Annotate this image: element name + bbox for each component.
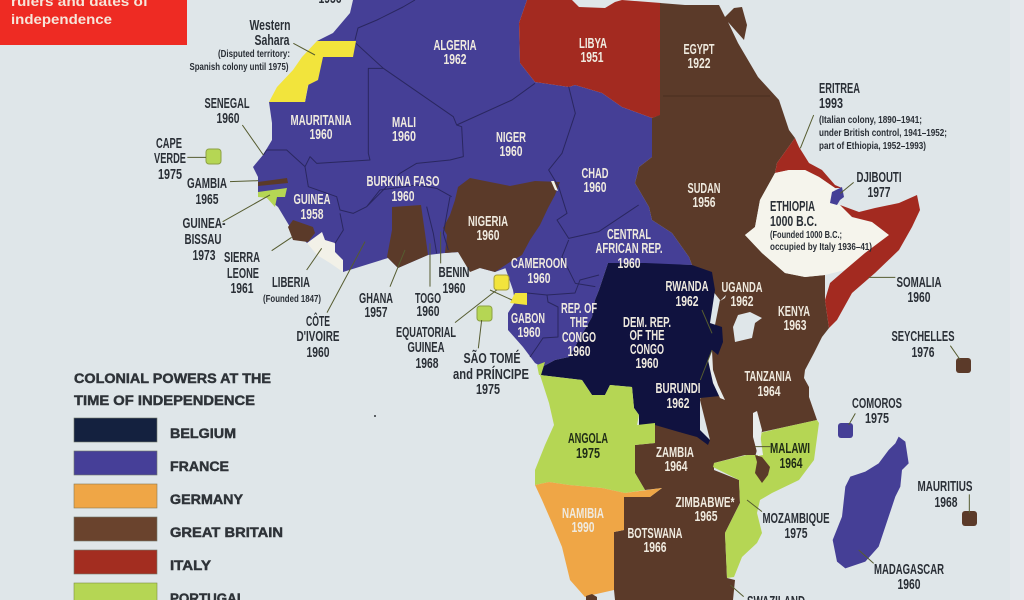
map of Africa <box>253 0 920 600</box>
label: Sudan: 1956 <box>692 195 716 211</box>
label: Mauritania: 1960 <box>310 127 332 143</box>
region: Malawi south <box>755 455 770 483</box>
note: Ethiopia history: occupied by Italy 1936–41) <box>770 241 872 253</box>
label: Seychelles: 1976 <box>912 345 934 361</box>
label: Equatorial Guinea: 1968 <box>416 356 438 372</box>
label: Chad: CHAD <box>582 166 608 182</box>
label: Angola <box>568 431 608 462</box>
label: Angola: 1975 <box>576 446 600 462</box>
label: Ghana: 1957 <box>364 305 388 321</box>
label: Cape Verde <box>154 136 186 183</box>
label: Rep. of the Congo: REP. OF <box>561 301 597 317</box>
label: Mali <box>392 115 416 145</box>
label: Western Sahara <box>190 18 290 73</box>
label: Gabon: GABON <box>511 311 545 327</box>
label: Niger <box>496 130 526 160</box>
label: Central African Rep. <box>596 227 662 272</box>
label: Libya <box>579 36 607 66</box>
note: Ethiopia history <box>770 229 872 253</box>
label: Tanzania: 1964 <box>758 384 780 400</box>
label: Rwanda <box>666 279 709 310</box>
label: Burkina Faso <box>366 174 440 205</box>
legend item: Belgium: BELGIUM <box>170 426 236 441</box>
label: Gambia: GAMBIA <box>187 176 227 192</box>
label: Dem. Rep. of the Congo: CONGO <box>630 342 664 358</box>
label: Burundi: 1962 <box>666 396 690 412</box>
label: Central African Rep.: CENTRAL <box>607 227 651 243</box>
note: Eritrea history: (Italian colony, 1890–1941; <box>819 114 922 126</box>
label: Guinea <box>294 192 331 223</box>
region: Lake Victoria <box>733 312 762 342</box>
label: Egypt: EGYPT <box>684 42 715 58</box>
label: Malawi <box>770 441 810 472</box>
label: Western Sahara: Spanish colony until 1975) <box>190 61 288 73</box>
label: Togo: 1960 <box>416 304 440 320</box>
label: Ghana: GHANA <box>359 291 393 307</box>
label: Gambia <box>187 176 227 208</box>
region: Djibouti <box>830 187 844 205</box>
label: Algeria <box>434 38 477 68</box>
region: South Africa fragment <box>586 594 597 600</box>
label: Egypt: 1922 <box>688 56 710 72</box>
label: Cote d'Ivoire: 1960 <box>306 345 330 361</box>
label: Sierra Leone: LEONE <box>227 266 259 282</box>
legend item: Germany <box>74 484 243 508</box>
label: Togo: TOGO <box>415 291 441 307</box>
label: Uganda <box>722 280 763 310</box>
label: Guinea: GUINEA <box>294 192 331 208</box>
label: Algeria: ALGERIA <box>434 38 477 54</box>
label: Cote d'Ivoire: D'IVOIRE <box>296 329 340 345</box>
label: Liberia <box>263 275 321 305</box>
label: Liberia: LIBERIA <box>272 275 310 291</box>
icon: Cape Verde <box>206 149 221 164</box>
label: Rep. of the Congo: THE <box>570 315 588 331</box>
label: Mozambique: MOZAMBIQUE <box>762 511 830 527</box>
legend item: Great Britain <box>74 517 283 541</box>
label: Cape Verde: VERDE <box>154 151 186 167</box>
label: Ethiopia: 1000 B.C. <box>770 214 817 230</box>
label: Somalia <box>896 275 942 306</box>
label: Mauritania: MAURITANIA <box>290 113 352 129</box>
icon: Seychelles <box>956 358 971 373</box>
label: Dem. Rep. of the Congo <box>623 315 671 372</box>
label: Uganda: UGANDA <box>722 280 763 296</box>
region: Western Sahara <box>269 41 356 102</box>
label: Mauritius <box>918 479 973 511</box>
label: Eritrea <box>819 81 860 112</box>
label: Somalia: SOMALIA <box>896 275 942 291</box>
label: Djibouti: 1977 <box>868 185 890 201</box>
region: Cabinda <box>537 362 545 375</box>
region: Lake Malawi <box>753 411 763 456</box>
label: Sierra Leone: 1961 <box>230 281 254 297</box>
label: Chad <box>582 166 608 196</box>
label: Mali: 1960 <box>392 129 416 145</box>
region: Sierra Leone <box>288 220 315 242</box>
label: Tanzania <box>744 369 792 400</box>
label: Cameroon: CAMEROON <box>511 256 567 272</box>
label: Madagascar: 1960 <box>898 577 920 593</box>
region: British colonies <box>614 3 829 600</box>
label: Namibia: NAMIBIA <box>562 506 604 522</box>
note: Ethiopia history: (Founded 1000 B.C.; <box>770 229 842 241</box>
label: Chad: 1960 <box>584 180 606 196</box>
label: Madagascar: MADAGASCAR <box>874 562 944 578</box>
legend item: Germany: GERMANY <box>170 492 243 507</box>
region: small lake by Uganda <box>720 295 726 301</box>
label: Sudan: SUDAN <box>688 181 720 197</box>
region: Libya <box>519 0 661 118</box>
label: Djibouti <box>856 170 902 201</box>
label: Western Sahara: Western <box>250 18 290 34</box>
icon: Mauritius <box>962 511 977 526</box>
label: Senegal: SENEGAL <box>204 96 250 112</box>
region: Ethiopia <box>745 170 889 277</box>
label: Comoros: 1975 <box>865 411 889 427</box>
label: Equatorial Guinea: EQUATORIAL <box>396 325 456 341</box>
legend title: TIME OF INDEPENDENCE <box>74 393 255 408</box>
region: Eritrea <box>775 138 842 188</box>
label: Eritrea: 1993 <box>819 96 843 112</box>
legend item: Italy: ITALY <box>170 558 211 573</box>
label: Cameroon <box>511 256 567 287</box>
label: Mali: MALI <box>392 115 416 131</box>
label: Rwanda: 1962 <box>676 294 698 310</box>
label: Nigeria: 1960 <box>476 228 500 244</box>
label: Somalia: 1960 <box>908 290 930 306</box>
label: Cape Verde: 1975 <box>158 167 182 183</box>
label: Ghana <box>359 291 393 321</box>
region: Belgian Congo <box>540 263 723 445</box>
label: Western Sahara: (Disputed territory: <box>218 48 290 60</box>
label: Zambia <box>656 445 694 475</box>
icon: Sao Tome <box>477 306 492 321</box>
legend item: Belgium <box>74 418 236 442</box>
label: Benin: BENIN <box>438 265 470 281</box>
label: Sao Tome and Principe <box>453 349 529 398</box>
label: Mauritius: 1968 <box>934 495 958 511</box>
label: Guinea-Bissau: 1973 <box>192 248 216 264</box>
label: Western Sahara: Sahara <box>254 33 290 49</box>
label: Libya: LIBYA <box>579 36 607 52</box>
label: Central African Rep.: AFRICAN REP. <box>596 241 662 257</box>
label: Namibia: 1990 <box>572 520 594 536</box>
label: Kenya: 1963 <box>784 318 806 334</box>
label: Ethiopia: ETHIOPIA <box>770 199 815 215</box>
label: Kenya: KENYA <box>778 304 810 320</box>
label: Ethiopia <box>770 199 817 230</box>
label: Benin <box>438 265 470 297</box>
region: Guinea-Bissau <box>258 188 287 207</box>
region: Egypt-Sudan border <box>663 95 770 97</box>
label: Burundi: BURUNDI <box>656 381 700 397</box>
label: Cote d'Ivoire <box>296 312 340 361</box>
label: Tanzania: TANZANIA <box>744 369 792 385</box>
label: Botswana: BOTSWANA <box>628 526 683 542</box>
label: Gambia: 1965 <box>196 192 218 208</box>
label: Gabon <box>511 311 545 341</box>
label: Rep. of the Congo <box>561 301 597 360</box>
note: Eritrea history: under British control, 1941–1952; <box>819 127 947 139</box>
legend item: France <box>74 451 229 475</box>
label: Niger: NIGER <box>496 130 526 146</box>
label: Mauritius: MAURITIUS <box>918 479 973 495</box>
label: Guinea-Bissau: GUINEA- <box>182 216 226 232</box>
label: Egypt <box>684 42 715 72</box>
legend title: COLONIAL POWERS AT THE <box>74 371 271 386</box>
note: Eritrea history <box>819 114 947 152</box>
label: Algeria: 1962 <box>444 52 466 68</box>
label: Zambia: 1964 <box>664 459 688 475</box>
label: Mozambique <box>762 511 830 542</box>
label: Guinea-Bissau: BISSAU <box>184 232 222 248</box>
leader lines <box>187 43 969 597</box>
label: Cape Verde: CAPE <box>156 136 182 152</box>
region: French colonies <box>253 0 692 367</box>
label: Sudan <box>688 181 720 211</box>
region: Equatorial Guinea mainland <box>510 293 527 305</box>
label: Madagascar <box>874 562 944 593</box>
label: Senegal: 1960 <box>216 111 240 127</box>
label: Togo <box>415 291 441 320</box>
region: Lake Tanganyika <box>708 350 725 400</box>
label: Guinea-Bissau <box>182 216 226 264</box>
legend item: Italy <box>74 550 211 574</box>
label: Malawi: 1964 <box>780 456 802 472</box>
label: Rep. of the Congo: 1960 <box>568 344 590 360</box>
label: Equatorial Guinea: GUINEA <box>408 340 445 356</box>
label: Angola: ANGOLA <box>568 431 608 447</box>
label: Djibouti: DJIBOUTI <box>856 170 902 186</box>
label: Senegal <box>204 96 250 127</box>
label: Uganda: 1962 <box>730 294 754 310</box>
islands <box>206 149 977 526</box>
label: Kenya <box>778 304 810 334</box>
label: Mozambique: 1975 <box>784 526 808 542</box>
label: Guinea: 1958 <box>300 207 324 223</box>
label: Equatorial Guinea <box>396 325 456 372</box>
legend title <box>74 371 271 408</box>
region: Ghana <box>387 205 428 268</box>
label: Zimbabwe: 1965 <box>694 509 718 525</box>
label: Seychelles <box>892 329 955 361</box>
label: Sierra Leone <box>224 250 260 297</box>
label: Botswana <box>628 526 683 556</box>
title block: independence <box>11 11 112 27</box>
note: Eritrea history: part of Ethiopia, 1952–1993) <box>819 140 926 152</box>
legend item: France: FRANCE <box>170 459 229 474</box>
label: Sao Tome and Principe: SÃO TOMÉ <box>464 349 521 367</box>
region: Gambia <box>258 178 288 186</box>
label: Botswana: 1966 <box>644 540 666 556</box>
label: Dem. Rep. of the Congo: DEM. REP. <box>623 315 671 331</box>
label: Cote d'Ivoire: CÔTE <box>306 312 330 330</box>
label: Comoros: COMOROS <box>852 396 902 412</box>
label: Cameroon: 1960 <box>528 271 550 287</box>
label: Sao Tome and Principe: and PRÍNCIPE <box>453 366 529 383</box>
label: Gabon: 1960 <box>518 325 540 341</box>
label: Liberia: (Founded 1847) <box>263 293 321 305</box>
label: Eritrea: ERITREA <box>819 81 860 97</box>
label: Nigeria <box>468 214 508 244</box>
icon: Bioko <box>494 275 509 290</box>
label: Zambia: ZAMBIA <box>656 445 694 461</box>
region: Somalia <box>825 195 920 328</box>
label: Zimbabwe <box>676 495 735 525</box>
region: Nigeria <box>443 178 560 272</box>
label: Sierra Leone: SIERRA <box>224 250 260 266</box>
label: Benin: 1960 <box>442 281 466 297</box>
label: Rwanda: RWANDA <box>666 279 709 295</box>
legend <box>74 371 283 600</box>
region: Angola <box>535 375 655 493</box>
label: Zimbabwe: ZIMBABWE* <box>676 495 735 511</box>
label: Sao Tome and Principe: 1975 <box>476 382 500 398</box>
region: Lake Chad <box>551 181 558 191</box>
region: Mozambique <box>713 420 819 578</box>
region: national borders west <box>263 0 639 357</box>
label: Burkina Faso: BURKINA FASO <box>366 174 440 190</box>
region: Namibia <box>535 482 662 597</box>
label: Seychelles: SEYCHELLES <box>892 329 955 345</box>
label: Nigeria: NIGERIA <box>468 214 508 230</box>
title block <box>0 0 187 45</box>
label: Burundi <box>656 381 700 412</box>
label: Dem. Rep. of the Congo: 1960 <box>636 356 658 372</box>
label: Libya: 1951 <box>580 50 604 66</box>
legend item: Great Britain: GREAT BRITAIN <box>170 525 283 540</box>
label: Malawi: MALAWI <box>770 441 810 457</box>
label: Namibia <box>562 506 604 536</box>
legend item: Portugal <box>74 583 245 600</box>
label: Comoros <box>852 396 902 427</box>
icon: Comoros <box>838 423 853 438</box>
label: Mauritania <box>290 113 352 143</box>
region: Liberia <box>307 232 343 272</box>
label: Central African Rep.: 1960 <box>618 256 640 272</box>
label: Dem. Rep. of the Congo: OF THE <box>630 328 665 344</box>
label: Niger: 1960 <box>500 144 522 160</box>
region: Madagascar <box>833 437 909 568</box>
label: Rep. of the Congo: CONGO <box>562 330 596 346</box>
label: Burkina Faso: 1960 <box>392 189 414 205</box>
